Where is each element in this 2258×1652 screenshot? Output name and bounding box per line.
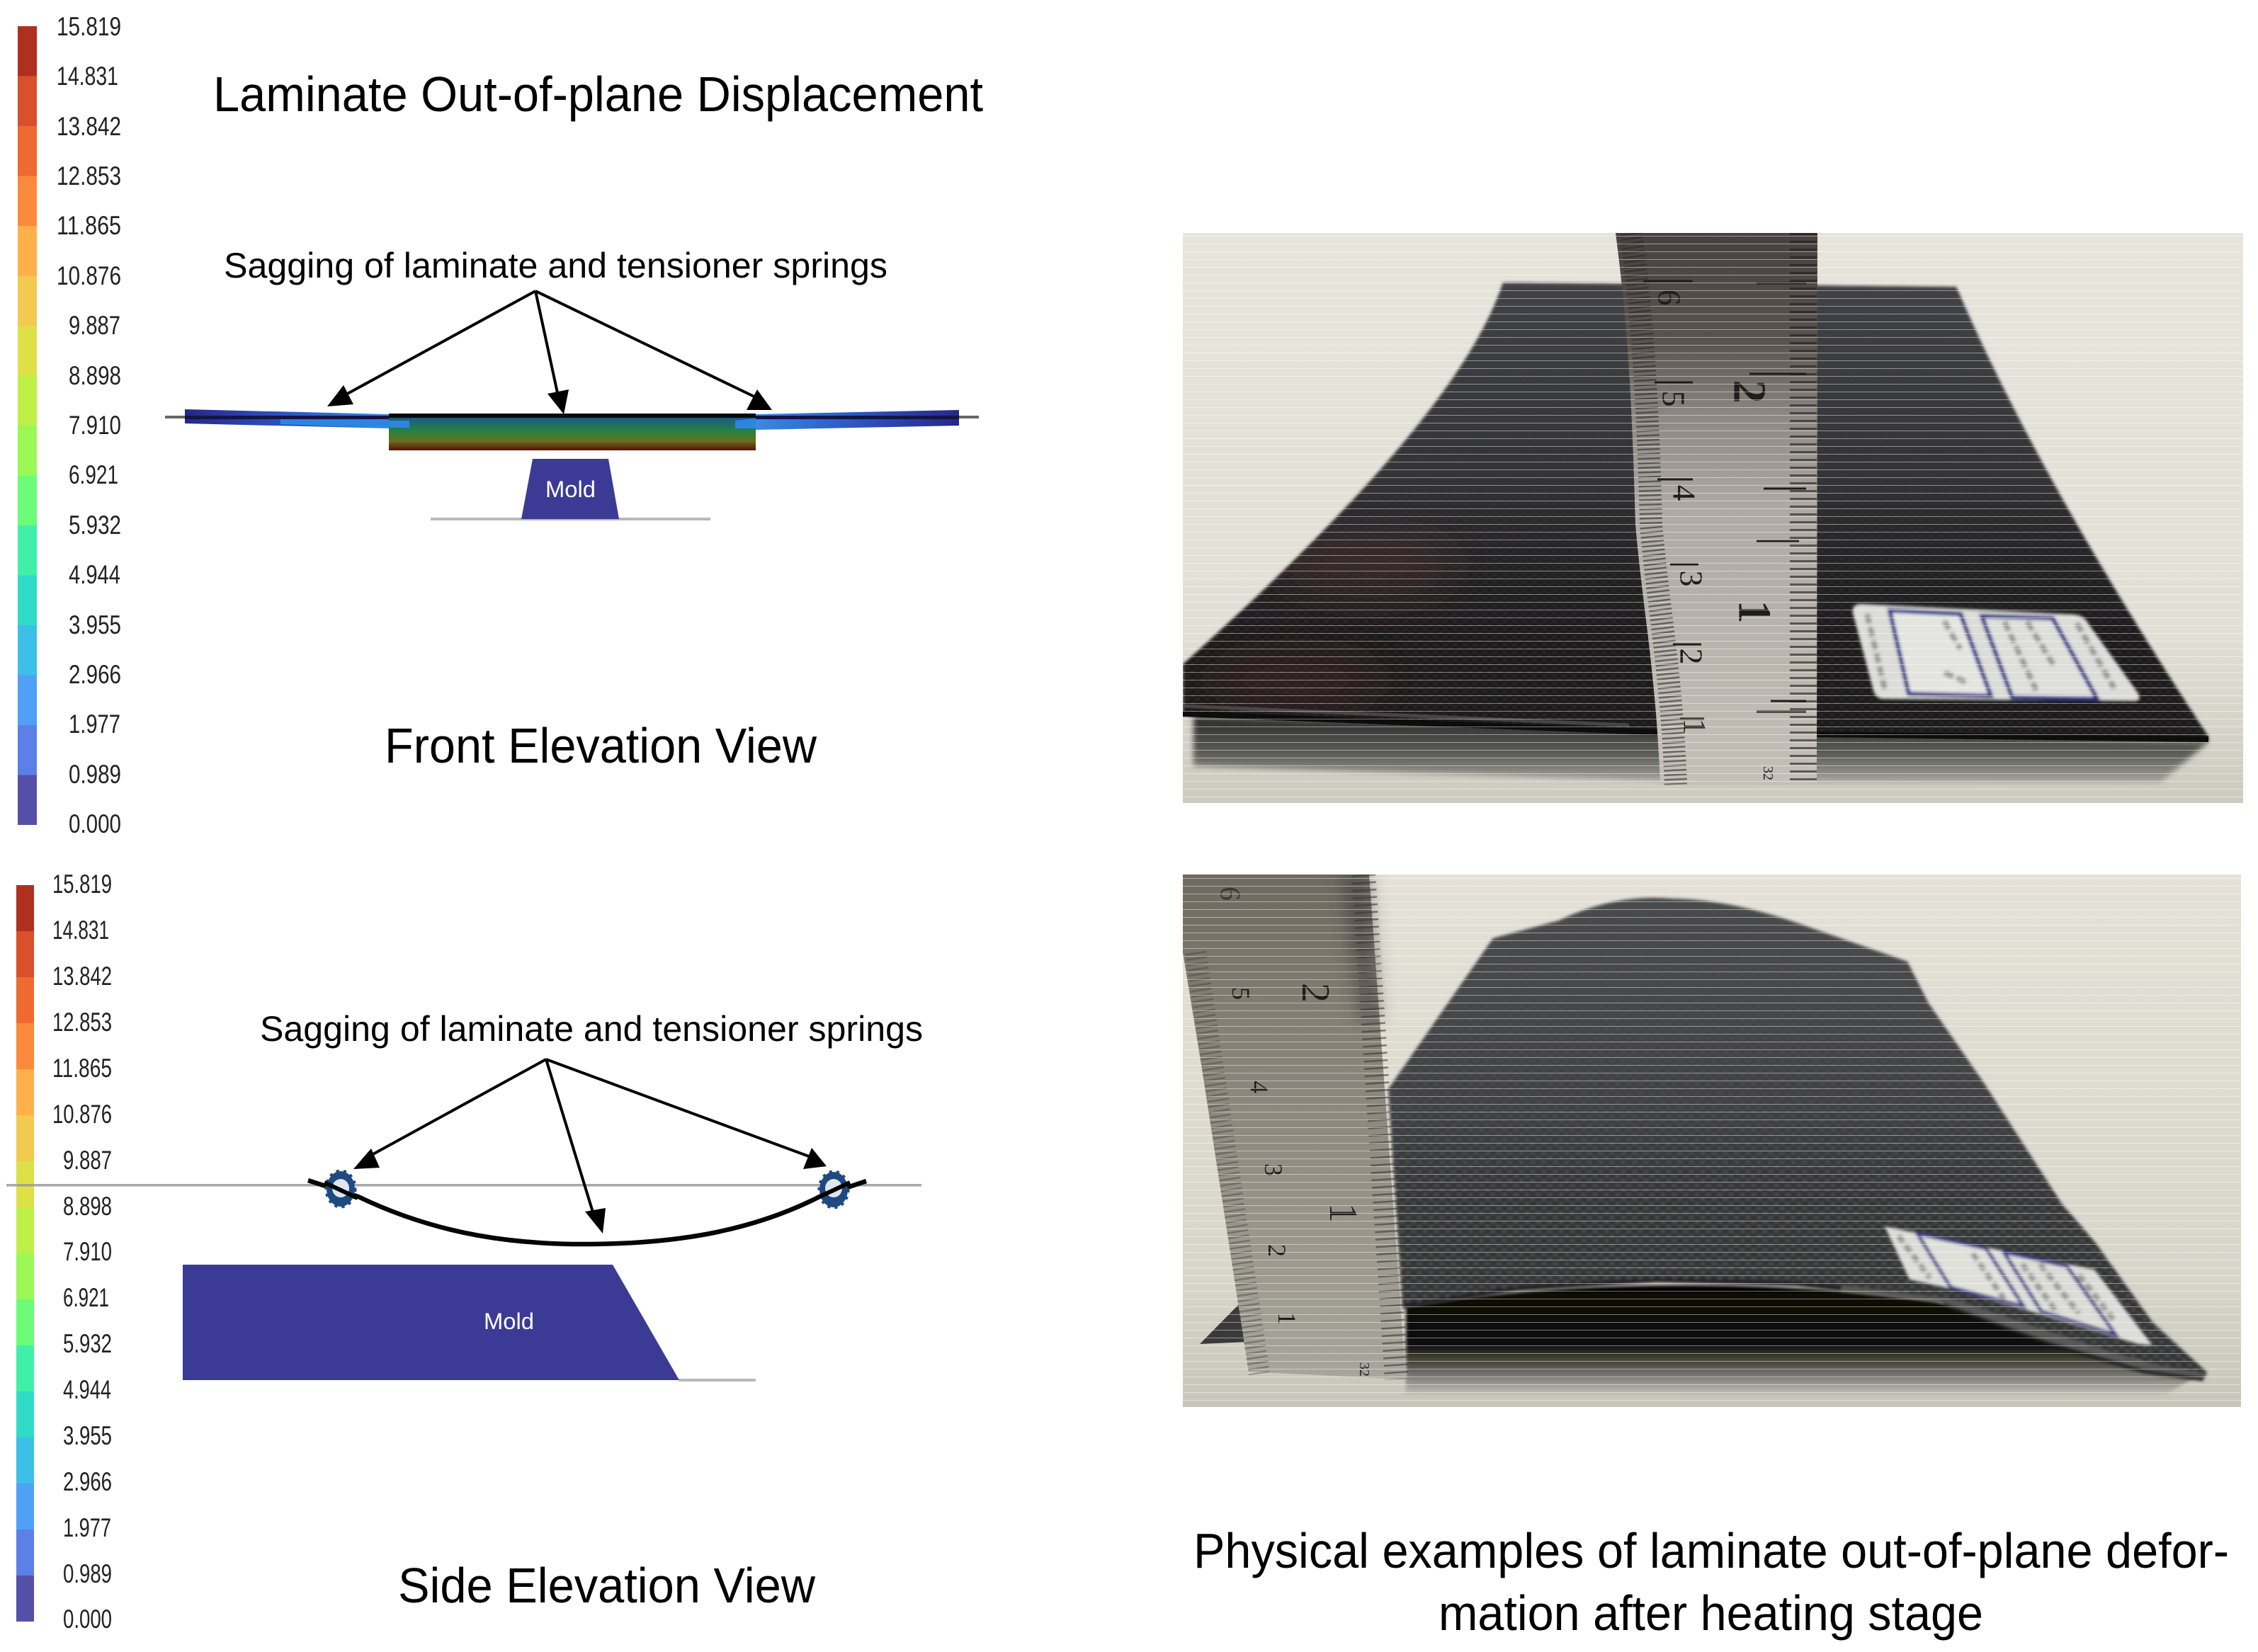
colour legend: front elevation: 1.977 — [69, 710, 120, 739]
colour legend: front elevation: 6.921 — [69, 460, 118, 489]
photo: side view of deformed laminate — [1183, 875, 2241, 1407]
panel: front elevation — [18, 12, 983, 838]
colour legend: side elevation: 12.853 — [52, 1008, 112, 1037]
colour legend: side elevation: 7.910 — [63, 1237, 112, 1266]
colour legend: front elevation: 14.831 — [57, 62, 118, 91]
mold: front view: Mold — [545, 477, 596, 502]
ruler: 2 — [1293, 983, 1337, 1003]
reference line — [6, 1184, 921, 1187]
colour legend: side elevation — [16, 870, 112, 1634]
colour legend: side elevation: 15.819 — [52, 870, 112, 899]
colour legend: front elevation — [18, 12, 121, 838]
colour legend: front elevation: 11.865 — [57, 211, 121, 240]
mold: side view — [183, 1265, 756, 1382]
ruler: 3 — [1259, 1163, 1288, 1176]
ruler: 2 — [1673, 649, 1710, 664]
colour legend: side elevation: 6.921 — [63, 1283, 109, 1312]
ruler — [1183, 875, 1406, 1379]
shadow under arch — [1406, 1285, 2196, 1398]
colour legend: front elevation: 0.000 — [69, 809, 121, 838]
colour legend: front elevation: 4.944 — [69, 560, 120, 589]
colour legend: front elevation: 8.898 — [69, 361, 121, 390]
ruler: 4 — [1245, 1081, 1273, 1093]
ruler: 32 — [1760, 766, 1776, 780]
ruler: 6 — [1214, 887, 1247, 901]
ruler: 1 — [1321, 1203, 1365, 1223]
laminate sheet — [1183, 283, 2208, 742]
ruler: 1 — [1273, 1312, 1301, 1325]
colour legend: front elevation: 3.955 — [69, 610, 121, 639]
title: Laminate Out-of-plane Displacement — [213, 67, 983, 122]
laminate sheet — [1388, 898, 2207, 1379]
colour legend: side elevation: 1.977 — [63, 1513, 111, 1542]
left sliver of laminate — [1200, 1304, 1244, 1344]
colour legend: side elevation: 5.932 — [63, 1329, 112, 1358]
mold: side view: Mold — [484, 1309, 534, 1334]
caption: physical examples: Physical examples of laminate out-of-plane defor- — [1193, 1523, 2229, 1578]
callout: sagging: Sagging of laminate and tensioner springs — [224, 246, 887, 285]
colour legend: front elevation: 7.910 — [69, 411, 121, 440]
heading: side elevation view: Side Elevation View — [398, 1558, 815, 1613]
colour legend: front elevation: 12.853 — [57, 161, 121, 190]
panel: side elevation — [6, 870, 923, 1634]
callout: sagging: Sagging of laminate and tensioner springs — [260, 1009, 923, 1049]
diagram: sagging laminate curve — [308, 1180, 866, 1244]
colour legend: side elevation: 3.955 — [63, 1421, 112, 1450]
arrows: sagging callout — [327, 291, 772, 414]
colour legend: front elevation: 0.989 — [69, 760, 121, 789]
ruler: 3 — [1673, 571, 1710, 586]
icon: right tensioner — [818, 1172, 850, 1207]
colour legend: side elevation: 0.989 — [63, 1559, 112, 1588]
icon: left tensioner — [324, 1171, 358, 1207]
ruler: 2 — [1263, 1244, 1291, 1257]
colour legend: side elevation: 13.842 — [52, 962, 112, 991]
arrows: sagging callout — [353, 1059, 827, 1234]
photo: front view of deformed laminate — [1183, 233, 2243, 803]
ruler — [1616, 233, 1817, 785]
ruler: 1 — [1677, 718, 1713, 735]
colour legend: front elevation: 15.819 — [57, 12, 121, 41]
caption: physical examples — [1193, 1523, 2229, 1641]
ruler: 5 — [1656, 391, 1691, 406]
colour legend: front elevation: 9.887 — [69, 311, 120, 340]
ruler: 6 — [1652, 289, 1687, 306]
colour legend: side elevation: 8.898 — [63, 1192, 112, 1221]
heading: front elevation view: Front Elevation View — [385, 718, 817, 773]
colour legend: side elevation: 4.944 — [63, 1375, 111, 1404]
colour legend: side elevation: 2.966 — [63, 1467, 112, 1496]
colour legend: front elevation: 2.966 — [69, 660, 121, 689]
ruler: 32 — [1356, 1362, 1372, 1377]
colour legend: front elevation: 5.932 — [69, 511, 121, 540]
colour legend: side elevation: 11.865 — [52, 1054, 112, 1083]
ruler: 1 — [1728, 600, 1781, 623]
diagram: laminate front view — [165, 409, 979, 450]
colour legend: side elevation: 9.887 — [63, 1146, 112, 1175]
colour legend: front elevation: 13.842 — [57, 112, 121, 141]
ruler: 2 — [1724, 380, 1775, 404]
colour legend: side elevation: 10.876 — [52, 1100, 112, 1129]
mold: front view — [431, 459, 710, 520]
colour legend: side elevation: 14.831 — [52, 916, 109, 945]
sample label — [1853, 604, 2140, 701]
sample label — [1885, 1226, 2152, 1345]
caption: physical examples: mation after heating stage — [1439, 1585, 1983, 1641]
colour legend: front elevation: 10.876 — [57, 261, 121, 290]
colour legend: side elevation: 0.000 — [63, 1605, 112, 1634]
ruler: 5 — [1227, 987, 1255, 1000]
ruler: 4 — [1666, 484, 1703, 501]
